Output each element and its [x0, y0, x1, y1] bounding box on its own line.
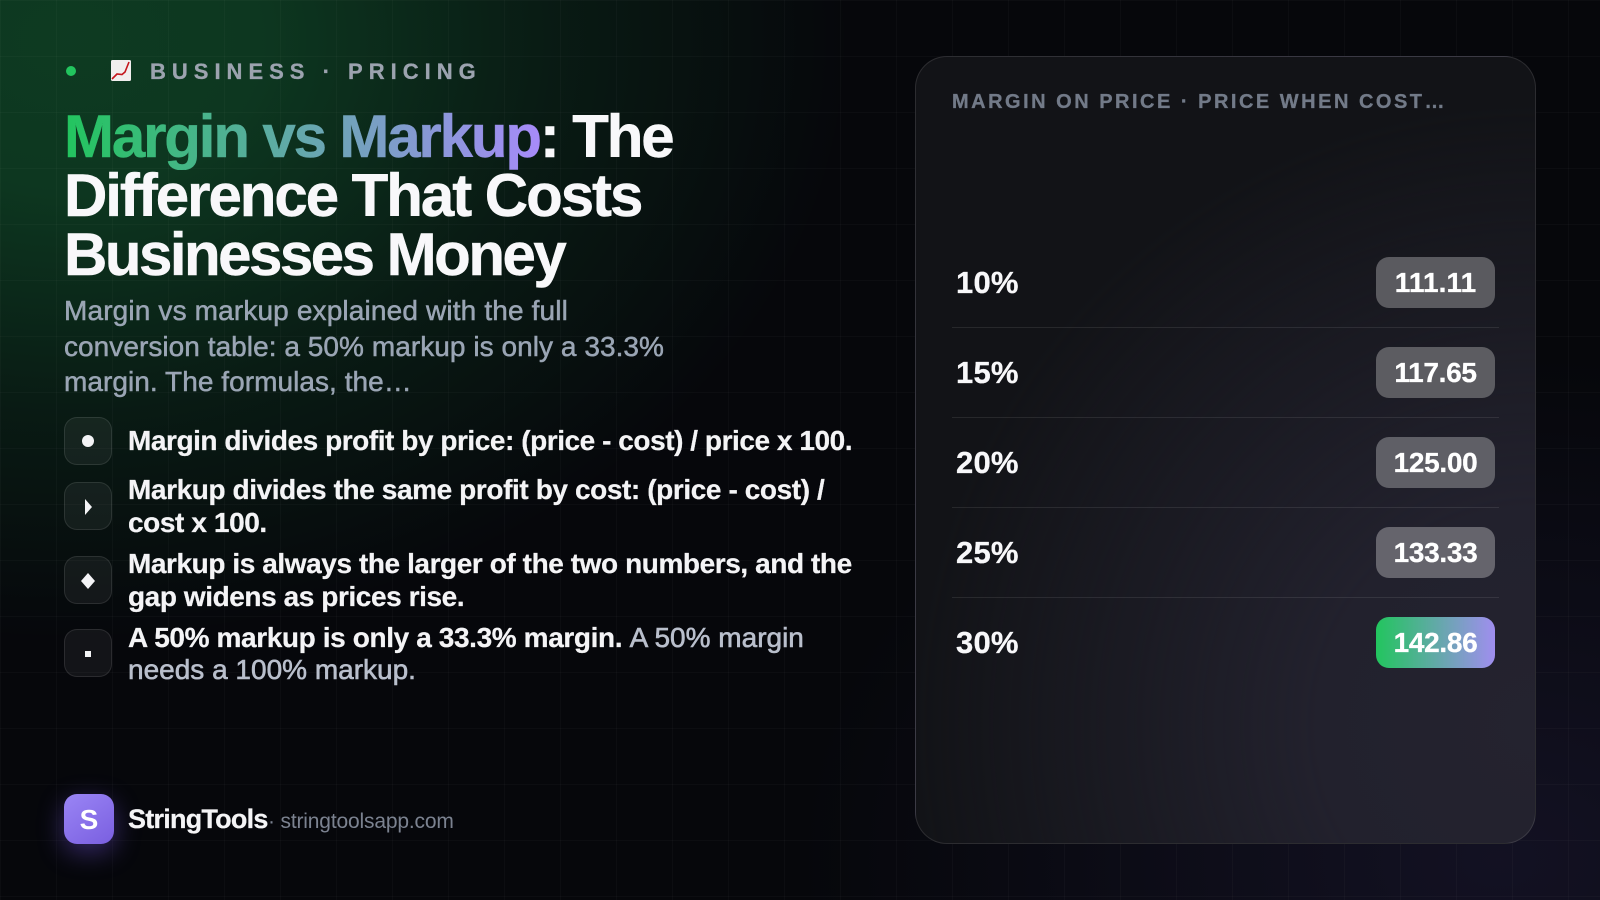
value: 125.00	[1394, 447, 1477, 478]
row 30% highlighted	[956, 617, 1495, 668]
bullet 4	[64, 622, 804, 686]
label: 20%	[956, 445, 1019, 480]
subtitle: margin. The formulas, the…	[64, 366, 412, 397]
bullet 3 text: gap widens as prices rise.	[128, 580, 464, 612]
value	[1376, 437, 1495, 488]
brand name: StringTools	[128, 804, 268, 834]
bullet 4 text: needs a 100% markup.	[128, 654, 416, 685]
subtitle: conversion table: a 50% markup is only a 33.3%	[64, 331, 664, 362]
bullet 2	[64, 474, 825, 538]
icon: green dot	[66, 66, 76, 76]
label: 15%	[956, 355, 1019, 390]
title: Difference That Costs	[64, 162, 641, 229]
value	[1376, 257, 1495, 308]
row 20%	[956, 437, 1495, 488]
bullet 2 text: Markup divides the same profit by cost: (price - cost) /	[128, 474, 824, 505]
icon: circle	[64, 417, 112, 465]
row 15%	[956, 347, 1495, 398]
eyebrow text: BUSINESS · PRICING	[150, 59, 482, 84]
value	[1376, 617, 1495, 668]
row 25%	[956, 527, 1495, 578]
value	[1376, 527, 1495, 578]
value	[1376, 347, 1495, 398]
icon: triangle	[64, 482, 112, 530]
icon: square	[64, 629, 112, 677]
title	[64, 103, 673, 288]
label: 25%	[956, 535, 1019, 570]
bullet 2 text: cost x 100.	[128, 506, 267, 538]
title: Margin vs Markup: The	[64, 103, 673, 170]
bullet 1	[64, 417, 852, 465]
bullet 4 text	[128, 622, 804, 686]
logo	[64, 794, 114, 844]
panel: conversion table	[915, 56, 1536, 844]
bullet 3 text	[128, 548, 852, 612]
logo: S	[80, 804, 98, 835]
brand footer	[48, 786, 454, 868]
subtitle	[64, 295, 664, 398]
value: 117.65	[1394, 357, 1477, 388]
bullet 1 text: Margin divides profit by price: (price - cost) / price x 100.	[128, 425, 852, 456]
label: 30%	[956, 625, 1019, 660]
panel heading: MARGIN ON PRICE · PRICE WHEN COST…	[952, 91, 1447, 113]
subtitle: Margin vs markup explained with the full	[64, 295, 568, 326]
label: 10%	[956, 265, 1019, 300]
value: 111.11	[1395, 267, 1476, 298]
bullet 3 text: Markup is always the larger of the two numbers, and the	[128, 548, 852, 579]
icon: diamond	[64, 556, 112, 604]
value: 142.86	[1394, 627, 1477, 658]
bullet 2 text	[128, 474, 825, 538]
icon: chart emoji	[111, 60, 131, 81]
value: 133.33	[1394, 537, 1477, 568]
bullet 4 text: A 50% markup is only a 33.3% margin. A 50% margin	[128, 622, 804, 653]
site url: · stringtoolsapp.com	[268, 810, 454, 833]
row 10%	[956, 257, 1495, 308]
bullet 3	[64, 548, 852, 612]
eyebrow	[66, 59, 482, 84]
title: Businesses Money	[64, 221, 564, 288]
